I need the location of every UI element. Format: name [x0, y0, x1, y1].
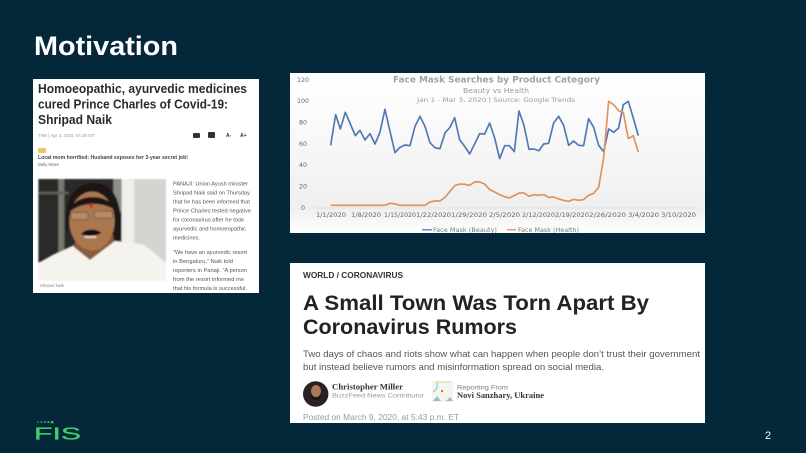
chart date and source: Jan 1 - Mar 3, 2020 | Source: Google Trends — [416, 97, 575, 104]
article body text: medicines. — [173, 236, 200, 242]
chart subtitle: Beauty vs Health — [463, 87, 529, 95]
photo caption: Shripad Naik — [40, 283, 65, 288]
x axis labels — [316, 212, 696, 219]
chart title: Face Mask Searches by Product Category — [393, 76, 600, 86]
article headline — [38, 81, 247, 127]
panel: BuzzFeed news article — [290, 263, 705, 423]
article body text: that his formula is successful. — [173, 286, 247, 292]
article body text: reporters in Panaji. “A person — [173, 268, 247, 274]
chart legend — [422, 228, 579, 234]
chart legend: Face Mask (Health) — [518, 228, 579, 234]
article body text: that he has been informed that — [173, 200, 250, 206]
article headline: Homoeopathic, ayurvedic medicines — [38, 81, 247, 96]
reporting from label: Reporting From — [457, 384, 508, 392]
x axis labels: 1/15/2020 — [384, 212, 416, 219]
article date: Posted on March 9, 2020, at 5:43 p.m. ET — [303, 413, 459, 422]
panel: news article on Ayurvedic cure claim — [33, 79, 259, 293]
panel: face mask searches line chart — [290, 73, 705, 234]
y axis labels: 80 — [299, 120, 307, 126]
x axis labels: 2/12/2020 — [522, 212, 555, 219]
article summary: Two days of chaos and riots show what can happen when people don’t trust their government — [303, 349, 700, 360]
y axis labels: 0 — [301, 205, 305, 212]
article body text: ayurvedic and homoeopathic — [173, 226, 246, 232]
logo wordmark: FIS — [34, 424, 81, 444]
article headline: Coronavirus Rumors — [303, 315, 517, 339]
x axis labels: 2/19/2020 — [555, 212, 589, 219]
x axis labels: 2/26/2020 — [589, 212, 626, 219]
y axis labels — [297, 77, 309, 212]
x axis labels: 3/10/2020 — [661, 212, 696, 219]
article summary — [303, 349, 700, 373]
article headline: cured Prince Charles of Covid-19: — [38, 96, 228, 112]
photo: Shripad Naik — [38, 179, 166, 281]
x axis labels: 1/1/2020 — [316, 212, 346, 219]
ad source: Daily News — [38, 162, 60, 167]
icon: location map — [432, 381, 453, 402]
title: Motivation — [34, 31, 178, 61]
line: face mask health — [331, 101, 638, 205]
x axis labels: 1/8/2020 — [351, 212, 381, 219]
article body text: from the resort informed me — [173, 277, 244, 283]
ad tag — [38, 148, 46, 153]
article body text: for coronavirus after he took — [173, 218, 244, 224]
article headline: A Small Town Was Torn Apart By — [303, 291, 649, 315]
article body text: Shripad Naik said on Thursday — [173, 190, 250, 196]
ad headline: Local mom horrified: Husband exposes her 3-year secret job! — [38, 155, 188, 161]
author role: BuzzFeed News Contributor — [332, 392, 425, 400]
x axis labels: 1/22/2020 — [416, 212, 451, 219]
article section label: WORLD / CORONAVIRUS — [303, 270, 403, 280]
article body text: PANAJI: Union Ayush minister — [173, 182, 248, 188]
article body text — [173, 182, 251, 292]
logo: FIS — [34, 421, 81, 444]
article headline: Shripad Naik — [38, 112, 113, 127]
article body text: “We have an ayurvedic resort — [173, 250, 247, 256]
article date line: TNN | Apr 3, 2020, 04:29 IST — [38, 133, 95, 138]
y axis labels: 40 — [299, 162, 307, 169]
y axis labels: 60 — [299, 141, 307, 148]
y axis labels: 120 — [297, 77, 309, 84]
author name: Christopher Miller — [332, 382, 403, 392]
page number: 2 — [765, 430, 771, 442]
y axis labels: 20 — [299, 184, 307, 190]
share and font-size icons — [193, 132, 247, 139]
x axis labels: 3/4/2020 — [628, 212, 659, 219]
article summary: but instead believe rumors and misinformation spread on social media. — [303, 362, 604, 373]
line: face mask beauty — [331, 101, 638, 159]
x axis labels: 1/29/2020 — [451, 212, 487, 219]
share and font-size icons: A+ — [240, 133, 247, 139]
author avatar — [303, 381, 328, 407]
article body text: in Bengaluru,” Naik told — [173, 259, 233, 265]
logo dots — [37, 421, 53, 423]
x axis labels: 2/5/2020 — [489, 212, 520, 219]
reporting location: Novi Sanzhary, Ukraine — [457, 391, 544, 400]
article headline — [303, 291, 649, 339]
chart legend: Face Mask (Beauty) — [433, 228, 497, 234]
share and font-size icons: A- — [226, 133, 232, 139]
y axis labels: 100 — [297, 98, 309, 105]
article body text: Prince Charles tested negative — [173, 208, 251, 214]
